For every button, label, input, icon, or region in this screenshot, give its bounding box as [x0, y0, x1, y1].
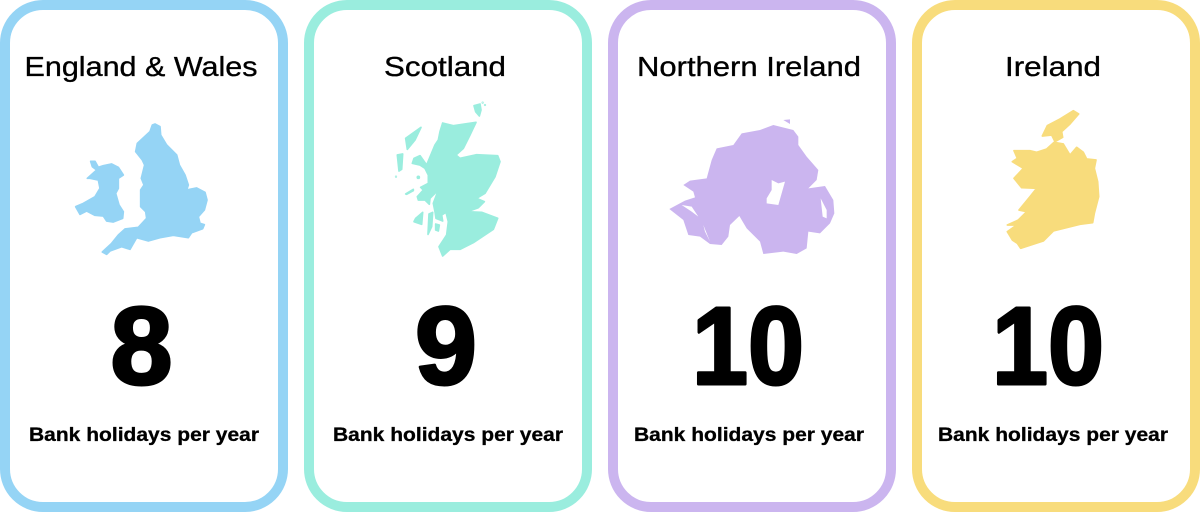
icon: map of Scotland: [396, 102, 500, 256]
icon: map of Ireland: [1007, 111, 1099, 248]
card border: [5, 5, 283, 507]
label: Bank holidays per year: Bank holidays per year: [634, 424, 864, 446]
card border: [309, 5, 587, 507]
icon: map of England and Wales: [76, 124, 207, 254]
icon: map of Northern Ireland: [669, 119, 834, 254]
panel: Northern Ireland: [613, 5, 891, 507]
label: Bank holidays per year: Bank holidays per year: [333, 424, 563, 446]
number: 9: 9: [415, 285, 477, 408]
label: Bank holidays per year: Bank holidays per year: [938, 424, 1168, 446]
heading: Northern Ireland: Northern Ireland: [637, 51, 861, 82]
heading: Scotland: Scotland: [384, 51, 506, 82]
number: 8: 8: [110, 285, 172, 408]
heading: Ireland: Ireland: [1005, 51, 1101, 82]
number: 10: 10: [992, 285, 1104, 408]
card border: [613, 5, 891, 507]
card border: [917, 5, 1195, 507]
panel: Scotland: [309, 5, 587, 507]
label: Bank holidays per year: Bank holidays per year: [29, 424, 259, 446]
panel: England & Wales: [5, 5, 283, 507]
panel: Ireland: [917, 5, 1195, 507]
heading: England & Wales: England & Wales: [24, 51, 258, 82]
number: 10: 10: [692, 285, 804, 408]
